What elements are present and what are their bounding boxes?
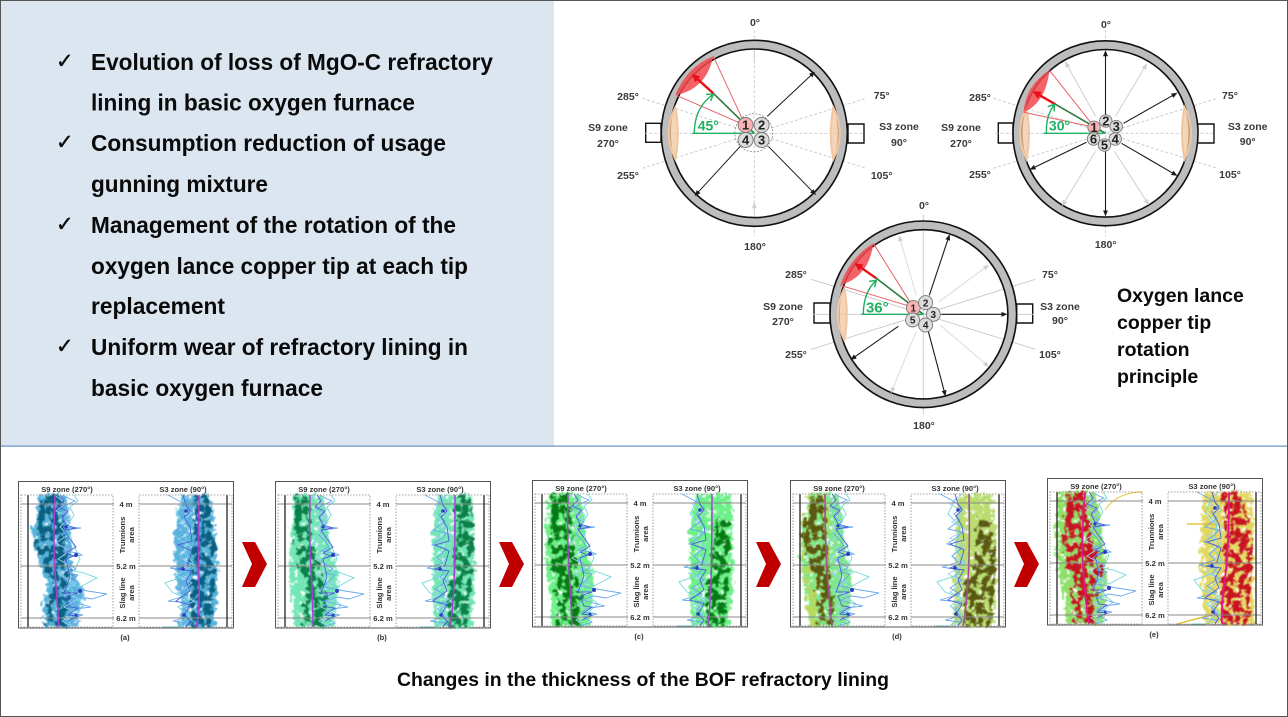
diagram: 5-hole lance, 36 degrees: 1 <box>911 303 917 314</box>
chart c: area <box>641 525 650 542</box>
chart e: area <box>1156 523 1165 540</box>
angle labels: 90° <box>891 137 907 149</box>
diagram: 6-hole lance, 30 degrees: 4 <box>1112 132 1120 147</box>
angle labels: 285° <box>785 269 807 281</box>
diagram: 6-hole lance, 30 degrees: 30° <box>1049 117 1070 133</box>
bullet 4: Uniform wear of refractory lining in <box>91 334 468 360</box>
chart b: 6.2 m <box>373 614 393 623</box>
nozzles <box>738 118 769 148</box>
angle labels: S9 zone <box>941 122 981 134</box>
chart b: 5.2 m <box>373 562 393 571</box>
angle labels: 105° <box>1039 349 1061 361</box>
diagram: 5-hole lance, 36 degrees: 5 <box>910 316 916 327</box>
chart d: S9 zone (270°) <box>813 484 865 493</box>
angle labels: S3 zone <box>879 121 919 133</box>
chart c: Trunnions <box>632 516 641 552</box>
angle labels: 255° <box>785 349 807 361</box>
chart c: 4 m <box>633 499 647 508</box>
bottom caption: Changes in the thickness of the BOF refractory lining <box>397 669 889 691</box>
angle labels: 285° <box>617 91 639 103</box>
chart e: S9 zone (270°) <box>1070 482 1122 491</box>
diagram: 6-hole lance, 30 degrees: 2 <box>1102 114 1109 129</box>
diagram: 5-hole lance, 36 degrees <box>763 200 1080 432</box>
bullet 3: replacement <box>91 293 225 319</box>
chart e <box>1048 478 1262 639</box>
chart a: area <box>127 584 136 601</box>
bullet 2: ✓ <box>56 130 74 154</box>
angle labels: 0° <box>750 17 760 29</box>
diagram caption <box>1117 285 1244 388</box>
chart e: S3 zone (90°) <box>1188 482 1236 491</box>
chart d: Trunnions <box>890 516 899 552</box>
chart a: Slag line <box>118 577 127 609</box>
chart a: 5.2 m <box>116 562 136 571</box>
angle labels: 180° <box>913 420 935 432</box>
diagram caption: copper tip <box>1117 312 1211 334</box>
chart e: 4 m <box>1148 497 1162 506</box>
bullet 3: oxygen lance copper tip at each tip <box>91 253 468 279</box>
chart e: 6.2 m <box>1145 611 1165 620</box>
chart a <box>18 482 234 642</box>
bullet 3: ✓ <box>56 212 74 236</box>
diagram: 6-hole lance, 30 degrees: 1 <box>1090 120 1098 135</box>
bullet 3 <box>56 212 468 319</box>
chart d: S3 zone (90°) <box>931 484 979 493</box>
arrow d to e <box>1014 542 1039 587</box>
diagram: 4-hole lance, 45 degrees: 45° <box>698 117 719 133</box>
angle labels: 90° <box>1052 315 1068 327</box>
diagram: 4-hole lance, 45 degrees: 1 <box>742 118 749 133</box>
angle labels: 270° <box>950 138 972 150</box>
chart c: Slag line <box>632 576 641 608</box>
diagram: 6-hole lance, 30 degrees <box>941 19 1268 251</box>
diagram: 4-hole lance, 45 degrees: 3 <box>758 133 765 148</box>
chart d: 5.2 m <box>888 561 908 570</box>
chart a: 6.2 m <box>116 614 136 623</box>
angle labels <box>588 17 919 253</box>
chart b: Trunnions <box>375 517 384 553</box>
chart c: 5.2 m <box>630 561 650 570</box>
bullet 2 <box>56 130 446 197</box>
arrow b to c <box>499 542 524 587</box>
arrow a to b <box>242 542 267 587</box>
nozzles <box>1087 115 1122 151</box>
angle labels: S9 zone <box>588 122 628 134</box>
diagram: 5-hole lance, 36 degrees: 2 <box>923 298 929 309</box>
angle labels: 180° <box>744 241 766 253</box>
nozzles <box>906 296 940 332</box>
diagram caption: Oxygen lance <box>1117 285 1244 307</box>
diagram: 5-hole lance, 36 degrees: 4 <box>923 321 929 332</box>
chart b: area <box>384 584 393 601</box>
bullet 2: Consumption reduction of usage <box>91 130 446 156</box>
diagram: 6-hole lance, 30 degrees: 3 <box>1113 119 1120 134</box>
angle labels <box>763 200 1080 432</box>
chart b: 4 m <box>376 500 390 509</box>
chart d: Slag line <box>890 576 899 608</box>
chart b: S3 zone (90°) <box>416 485 464 494</box>
bullet 1: lining in basic oxygen furnace <box>91 90 415 116</box>
chart b: area <box>384 526 393 543</box>
chart d: 4 m <box>891 499 905 508</box>
diagram: 4-hole lance, 45 degrees: 2 <box>758 118 765 133</box>
diagram caption: principle <box>1117 366 1198 388</box>
bullet 3: Management of the rotation of the <box>91 212 456 238</box>
angle labels: S3 zone <box>1040 301 1080 313</box>
chart e: Slag line <box>1147 574 1156 606</box>
angle labels: 0° <box>1101 19 1111 31</box>
angle labels: 255° <box>969 169 991 181</box>
bullet 4: ✓ <box>56 334 74 358</box>
chart b <box>276 482 490 642</box>
bullet 4 <box>56 334 468 401</box>
chart e: area <box>1156 581 1165 598</box>
angle labels: 285° <box>969 92 991 104</box>
panel: key points <box>1 1 554 446</box>
angle labels: 270° <box>597 138 619 150</box>
angle labels: 90° <box>1240 136 1256 148</box>
chart a: Trunnions <box>118 517 127 553</box>
chart a: S9 zone (270°) <box>41 485 93 494</box>
chart c: S3 zone (90°) <box>673 484 721 493</box>
chart b: (b) <box>377 633 387 642</box>
angle labels: 0° <box>919 200 929 212</box>
diagram: 5-hole lance, 36 degrees: 3 <box>931 310 937 321</box>
angle labels: 105° <box>1219 169 1241 181</box>
bullet 1: Evolution of loss of MgO-C refractory <box>91 49 493 75</box>
section divider <box>1 446 1287 447</box>
diagram: 4-hole lance, 45 degrees <box>588 17 919 253</box>
chart d <box>790 480 1006 641</box>
chart d: area <box>899 525 908 542</box>
chart e: 5.2 m <box>1145 559 1165 568</box>
angle labels: 180° <box>1095 239 1117 251</box>
arrow c to d <box>756 542 781 587</box>
chart a: 4 m <box>119 500 133 509</box>
diagram: 6-hole lance, 30 degrees: 6 <box>1090 132 1097 147</box>
chart c: area <box>641 583 650 600</box>
chart d: 6.2 m <box>888 613 908 622</box>
angle labels: 255° <box>617 170 639 182</box>
angle labels: 75° <box>1222 90 1238 102</box>
angle labels: 75° <box>1042 269 1058 281</box>
bullet 4: basic oxygen furnace <box>91 375 323 401</box>
chart c: 6.2 m <box>630 613 650 622</box>
chart c: (c) <box>634 632 644 641</box>
chart e: (e) <box>1149 630 1159 639</box>
bullet 2: gunning mixture <box>91 171 268 197</box>
chart a: (a) <box>120 633 130 642</box>
diagram: 6-hole lance, 30 degrees: 5 <box>1101 138 1108 153</box>
chart b: S9 zone (270°) <box>298 485 350 494</box>
bullet 1: ✓ <box>56 49 74 73</box>
chart d: (d) <box>892 632 902 641</box>
chart c <box>532 480 748 641</box>
chart c: S9 zone (270°) <box>555 484 607 493</box>
angle labels <box>941 19 1268 251</box>
angle labels: S3 zone <box>1228 121 1268 133</box>
chart d: area <box>899 583 908 600</box>
chart a: S3 zone (90°) <box>159 485 207 494</box>
diagram: 5-hole lance, 36 degrees: 36° <box>866 299 889 316</box>
chart e: Trunnions <box>1147 514 1156 550</box>
bullet 1 <box>56 49 493 116</box>
diagram caption: rotation <box>1117 339 1190 361</box>
angle labels: 270° <box>772 316 794 328</box>
chart b: Slag line <box>375 577 384 609</box>
diagram: 4-hole lance, 45 degrees: 4 <box>742 133 750 148</box>
chart a: area <box>127 526 136 543</box>
angle labels: 75° <box>874 90 890 102</box>
angle labels: S9 zone <box>763 301 803 313</box>
angle labels: 105° <box>871 170 893 182</box>
